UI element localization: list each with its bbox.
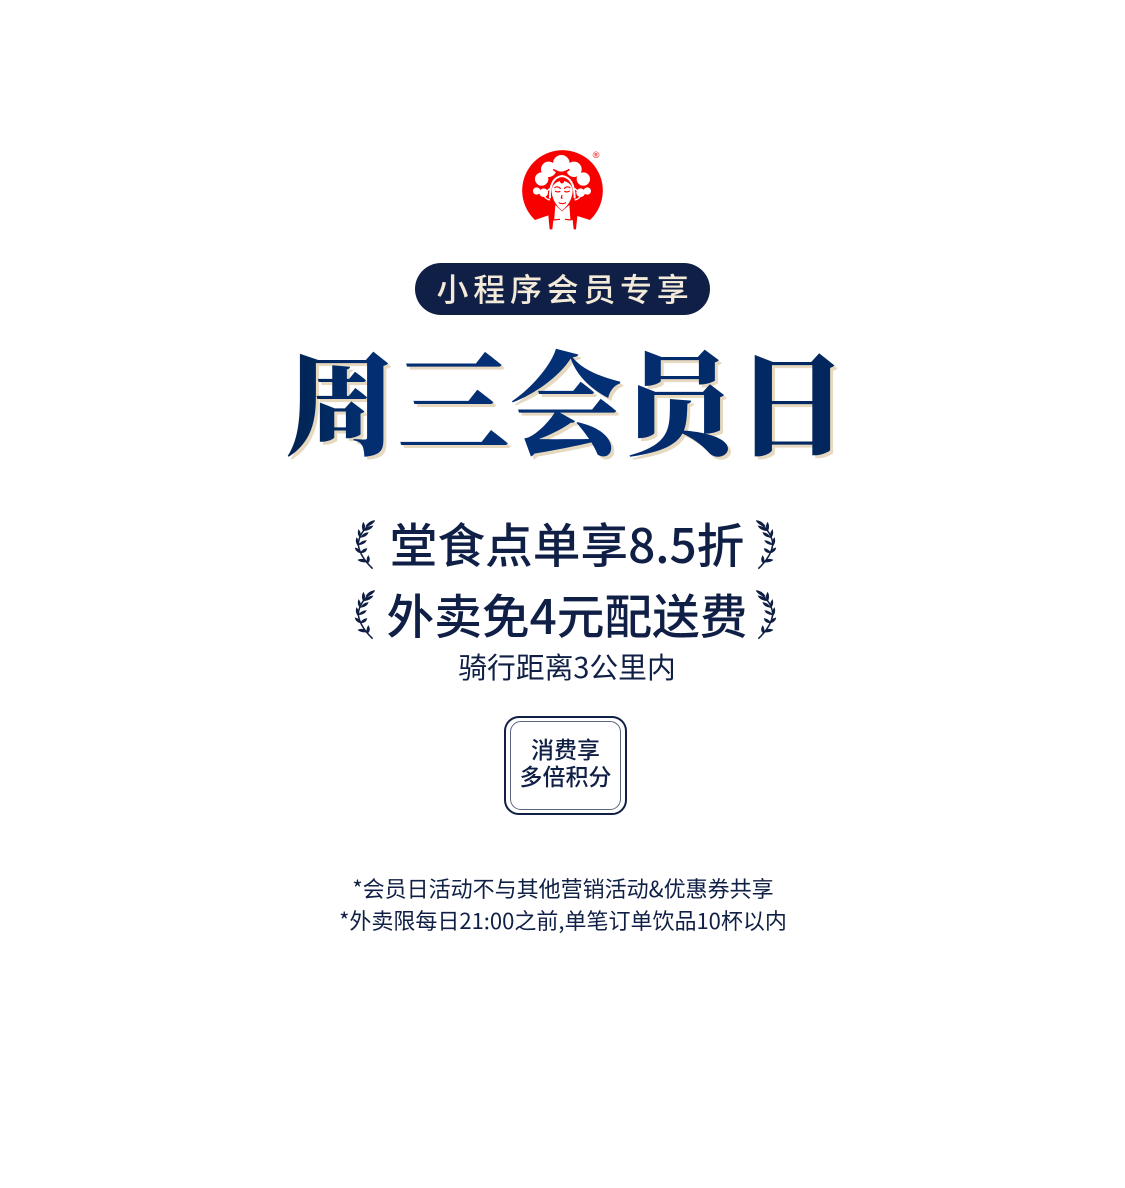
stamp text: [520, 731, 612, 792]
footnote 2: *外卖限每日21:00之前,单笔订单饮品10杯以内: [339, 904, 787, 936]
badge text: 小程序会员专享: [437, 265, 693, 311]
distance note: 骑行距离3公里内: [458, 646, 676, 687]
icon: opera mask logo: [522, 150, 603, 230]
badge: mini program member exclusive: [415, 263, 710, 315]
title: 周三会员日: [284, 317, 848, 479]
footnote 1: *会员日活动不与其他营销活动&优惠券共享: [352, 872, 774, 904]
stamp text: 消费享: [531, 731, 600, 765]
icon: laurels: [354, 520, 776, 640]
stamp: multiple points: [504, 716, 627, 815]
stamp inner frame: [510, 721, 621, 810]
offer line: dine-in discount: 堂食点单享8.5折: [390, 508, 744, 577]
offer line: delivery fee: 外卖免4元配送费: [386, 579, 748, 648]
icon: opera mask logo: ®: [593, 150, 600, 160]
stamp text: 多倍积分: [520, 758, 612, 792]
